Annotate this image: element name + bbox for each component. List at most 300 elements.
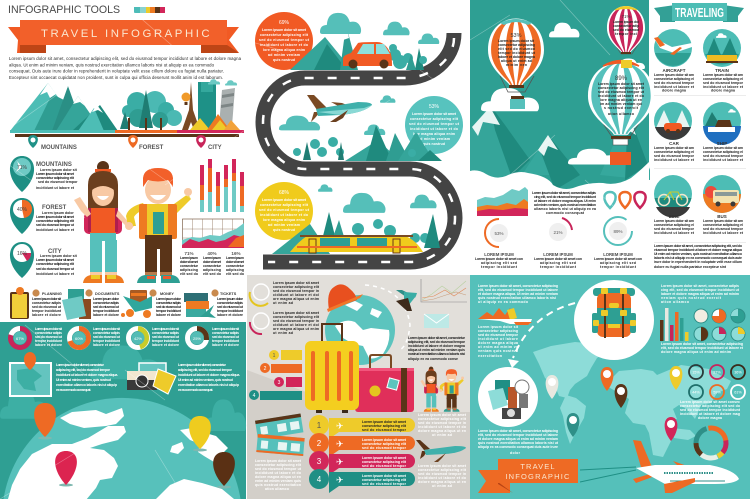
- numbered list step 2: 2: [317, 439, 322, 448]
- travel infographic banner: [478, 459, 578, 493]
- numbered list step 4: consectetur adipiscing elit: [362, 478, 407, 482]
- gauge: 21%: Lorem ipsum dolor sit amet con: [534, 257, 582, 261]
- numbered bars: 3: [278, 380, 281, 386]
- step: money: tempor incididunt: [156, 309, 182, 313]
- chart percentages with captions: Lorem ipsum: [180, 256, 198, 260]
- step: documents: DOCUMENTS: [95, 292, 120, 296]
- transport: car: Lorem ipsum dolor sit am: [654, 146, 694, 150]
- text block: top right: cing elit, sed do eiusmod tempor incididunt ut: [661, 288, 740, 292]
- text block: right: adipiscing elit, sed do eiusmod tempor: [408, 340, 466, 344]
- text block: top right: labore et dolore magna aliqua ut enim ad minim: [661, 292, 739, 296]
- location pin stat: mountains 71%: incididunt ut labore et: [36, 186, 75, 190]
- donut captions: labore et dolore: [35, 343, 62, 347]
- chart percentages with captions: consectetur: [203, 264, 222, 268]
- balloon: 53%: tempor incididunt ut: [498, 51, 536, 55]
- transport: train: Lorem ipsum dolor sit am: [703, 73, 743, 77]
- map pin: yellow: [189, 416, 211, 452]
- closing paragraph: Ut enim ad minim veniam, quis nostrud exercitation ullamco: [654, 252, 742, 256]
- gauge: 89%: tempor incididunt: [600, 265, 637, 269]
- small characters: [420, 367, 464, 412]
- text block: left: consectetur adipiscing: [478, 329, 518, 333]
- step: money: MONEY: [160, 292, 174, 296]
- text block: left: sed do eiusmod tempor: [478, 333, 519, 337]
- text block: characters: incididunt ut labore et do: [418, 425, 466, 429]
- panel: road poster top middle: [255, 12, 463, 262]
- text block: lower right: Lorem ipsum dolor sit amet consec: [680, 400, 740, 404]
- donut captions: sed do eiusmod ut: [93, 335, 121, 339]
- text block: lower right: sed do eiusmod tempor incididunt: [680, 408, 741, 412]
- ring stats: [689, 365, 745, 399]
- text block: map: [56, 363, 118, 392]
- text block: airplane: incididunt ut labore et do: [418, 476, 466, 480]
- timeline pin and label: city: CITY: [208, 145, 222, 151]
- text block: left: incididunt ut labore: [478, 337, 518, 341]
- step: documents: labore et dolore: [93, 313, 119, 317]
- shaded floor: [247, 370, 470, 499]
- text block: airplane: [418, 464, 467, 488]
- intro paragraph: consequat. Duis aute irure dolor in reprehenderit in voluptate velit esse cillum dolore eu fugiat nulla pariatur.: [9, 68, 224, 74]
- intro paragraph: Excepteur sint occaecat cupidatat non proident, sunt in culpa qui officia deserunt mollit anim id est laborum.: [9, 75, 223, 80]
- donut captions: consectetur adipis: [35, 331, 62, 335]
- text block: tickets: incididunt ut labore et do: [255, 471, 301, 475]
- stat circle: 68% yellow: sed do eiusmod tempor ut: [259, 208, 310, 212]
- text block: left: Lorem ipsum dolor sit: [478, 325, 519, 329]
- balloon: 89%: [588, 60, 654, 165]
- gauge: 89%: Lorem ipsum dolor sit amet con: [594, 257, 642, 261]
- numbered list step 1: Lorem ipsum dolor sit amet: [362, 420, 407, 424]
- donut captions: labore et dolore: [152, 343, 179, 347]
- numbered list step 1: sed do eiusmod tempor: [362, 428, 407, 432]
- clouds: [279, 13, 439, 213]
- text block: tickets: quis nostrud exercitation: [255, 483, 301, 487]
- chart percentages with captions: adipiscing: [226, 268, 244, 272]
- chart percentages with captions: 40%: [207, 251, 217, 256]
- transport: bus: incididunt ut labore et: [703, 231, 744, 235]
- text block: bottom left: elit, sed do eiusmod tempor incididunt ut labore: [478, 433, 558, 437]
- transport: car: sed do eiusmod tempor: [654, 154, 695, 158]
- stat circle: 53% teal: Lorem ipsum dolor sit amet: [412, 112, 457, 116]
- banner ropes: [580, 467, 636, 482]
- gauge with text 1: consectetur adipiscing elit: [273, 285, 320, 289]
- gauge with text 2: sed do eiusmod tempor in: [273, 319, 319, 323]
- colour swatches: [134, 7, 165, 13]
- text block: airplane: consectetur adipiscing elit: [418, 468, 467, 472]
- text block: bottom left: aliquip ex ea commodo consequat duis aute irure: [478, 445, 558, 449]
- panel: travel infographic poster top left: [8, 4, 245, 320]
- text block: lower right: dolore magna: [698, 416, 722, 420]
- donut stats with captions: [10, 327, 240, 348]
- gauge with text 2: ore magna aliqua ut enim: [273, 327, 319, 331]
- donut: 42%: 42%: [134, 336, 142, 341]
- location pin stat: city 16%: consectetur adipiscing elit: [36, 262, 75, 266]
- world map: [533, 342, 731, 457]
- text block: camera: [178, 363, 240, 392]
- balloon: 53%: labore et dolore magna: [498, 55, 535, 59]
- travel infographic banner: INFOGRAPHIC: [505, 472, 571, 481]
- gauge: 89%: 89%: [613, 229, 623, 234]
- numbered list step 4: 4: [317, 475, 322, 484]
- numbered list step 3: Lorem ipsum dolor sit amet: [362, 456, 407, 460]
- closing paragraph: eiusmod tempor incididunt ut labore et dolore magna aliqua: [654, 248, 742, 252]
- step: tickets: TICKETS: [220, 292, 237, 296]
- step: documents: Lorem ipsum dolor: [93, 297, 120, 301]
- stat circle: 68% yellow: [255, 182, 313, 240]
- timeline pin and label: mountains: MOUNTAINS: [41, 145, 77, 151]
- text block: top left: ut aliquip ex ea commodo: [478, 300, 528, 304]
- text block: tickets: ation ullamco: [265, 487, 289, 491]
- ring stats: 59%: [713, 390, 721, 394]
- location pin stat: forest 40%: Lorem ipsum dolor sit amet: [36, 215, 75, 219]
- balloon: 53%: minim ven: [506, 63, 527, 67]
- transport: ship: incididunt ut labore et: [703, 158, 744, 162]
- transport: aircraft: sed do eiusmod tempor: [654, 81, 695, 85]
- text block: lower right: [680, 400, 741, 420]
- closing paragraph: irure dolor in reprehenderit in voluptate velit esse cillum: [654, 260, 742, 264]
- step: tickets: [184, 289, 244, 318]
- step: planning: consectetur adipis: [32, 301, 61, 305]
- text block: left: veniam quis nostrud: [478, 349, 518, 353]
- stat circle: 53% teal: ad minim veniam: [418, 137, 450, 141]
- location pin stat: mountains 71%: Lorem ipsum dolor sit: [40, 168, 78, 172]
- stat circle: 69% orange: 69%: [279, 20, 290, 26]
- text block: top left: quis nostrud exercitation ullamco laboris nisi: [478, 296, 556, 300]
- transport: bike: BIKE: [669, 214, 679, 219]
- transport: ship: consectetur adipiscing el: [703, 150, 743, 154]
- gauge: 21%: [534, 218, 582, 269]
- travel items in circle: [478, 367, 538, 427]
- step: money: sed do eiusmod ut: [156, 305, 182, 309]
- step: tickets: consectetur adipis: [217, 301, 243, 305]
- text block: right: Lorem ipsum dolor sit amet, consectetur: [408, 336, 466, 340]
- balloon: 71%: consectetur adip: [613, 24, 639, 28]
- numbered list step 2: Lorem ipsum dolor sit amet: [362, 438, 407, 442]
- numbered list step 4: ✈: [336, 475, 344, 485]
- dashed route arc: [513, 303, 575, 358]
- dashed flight arc: [365, 285, 410, 350]
- text block: centre: ullamco laboris nisi ut aliquip ex ea: [534, 207, 596, 211]
- numbered list step 1: 1: [317, 421, 322, 430]
- illustration: city landmarks: [182, 79, 240, 130]
- text block: top left: et dolore magna aliqua. Ut enim ad minim veniam: [478, 292, 558, 296]
- car: [343, 42, 392, 68]
- stat circle: 53% teal: quis nostrud: [423, 142, 445, 146]
- chart percentages with captions: elit sed do: [226, 272, 244, 276]
- ring stats: 44%: [692, 390, 700, 394]
- text block: airplane: sed do eiusmod tempor in: [418, 472, 466, 476]
- numbered list step 4: Lorem ipsum dolor sit amet: [362, 474, 407, 478]
- step: money: labore et dolore: [156, 313, 181, 317]
- numbered bars: 1: [273, 353, 276, 359]
- title ribbon: [8, 20, 239, 53]
- text block: centre: [532, 191, 597, 215]
- balloon: 53%: elit sed do eiusmod: [498, 47, 535, 51]
- illustration: forest: [120, 90, 182, 130]
- yellow suitcase: [305, 324, 359, 413]
- text block: top left: [478, 284, 558, 304]
- text block: lower right: incididunt ut labore et dolore mag: [680, 412, 740, 416]
- intro paragraph: aliqua. Ut enim ad minim veniam, quis nostrud exercitation ullamco laboris nisi ut aliquip ex ea commodo: [9, 62, 215, 68]
- timeline pin and label: forest: FOREST: [139, 145, 164, 151]
- transport: car: CAR: [669, 141, 680, 146]
- text block: left: exercitation: [478, 354, 502, 358]
- stat circle: 68% yellow: 68%: [279, 190, 290, 196]
- text block: right: aliqua ut enim ad minim veniam quis: [408, 348, 465, 352]
- pink suitcase: [355, 355, 414, 412]
- numbered list step 3: [309, 451, 415, 475]
- numbered list step 4: sed do eiusmod tempor: [362, 482, 407, 486]
- gauge: 53%: LOREM IPSUM: [484, 252, 514, 257]
- chart percentages with captions: elit sed do: [203, 272, 221, 276]
- snowy mountains: [470, 105, 650, 190]
- transport: car: consectetur adipiscing el: [654, 150, 694, 154]
- stat circle: 53% teal: sed do eiusmod tempor ut: [409, 122, 460, 126]
- timeline pin and label: city: [196, 135, 222, 151]
- balloon: 53%: aliqua ut enim ad: [501, 59, 532, 63]
- transport: train: TRAIN: [715, 68, 729, 73]
- intro paragraph: [9, 56, 242, 80]
- gauge with text 1: Lorem ipsum dolor sit amet: [273, 281, 320, 285]
- gauge with text 1: ut enim ad: [273, 301, 293, 305]
- three pins: [604, 192, 646, 208]
- chart percentages with captions: 16%: [231, 251, 241, 256]
- stat circle: 68% yellow: consectetur adipiscing elit: [260, 203, 309, 207]
- transport: aircraft: Lorem ipsum dolor sit am: [654, 73, 694, 77]
- balloon: 89%: Lorem ipsum dolor sit amet: [598, 82, 645, 86]
- step: money: Lorem ipsum dolor: [156, 297, 182, 301]
- transport: ship: SHIP: [717, 141, 727, 146]
- donut captions: tempor incididunt: [152, 339, 180, 343]
- location pin stat: mountains 71%: Lorem ipsum dolor sit amet: [36, 172, 75, 176]
- donut: 60%: [70, 328, 89, 348]
- location pin stat: city 16%: sed do eiusmod tempor ut: [36, 267, 75, 271]
- intro paragraph: Lorem ipsum dolor sit amet, consectetur adipiscing elit, sed do eiusmod tempor incididunt ut labore et dolore magna: [9, 56, 242, 61]
- donut captions: sed do eiusmod ut: [212, 335, 240, 339]
- road: [263, 33, 455, 262]
- location pin stat: mountains 71%: [9, 156, 78, 192]
- balloon: 71%: [607, 6, 645, 68]
- stat circle: 69% orange: sed do eiusmod tempor ut: [259, 38, 310, 42]
- transport: ship: sed do eiusmod tempor: [703, 154, 744, 158]
- transport: bus: consectetur adipiscing el: [703, 223, 743, 227]
- location pin stat: city 16%: incididunt ut labore et: [36, 272, 75, 276]
- text block: bottom left: Lorem ipsum dolor sit amet, consectetur adipiscing: [478, 429, 558, 433]
- map pin: orange: [34, 403, 56, 440]
- text block: centre: Lorem ipsum dolor sit amet, consectetur adipis: [532, 191, 596, 195]
- numbered list step 1: [309, 415, 415, 439]
- text block: mid right: dolore magna aliqua ut enim ad minim: [661, 350, 731, 354]
- donut captions: tempor incididunt: [93, 339, 121, 343]
- numbered list step 3: 3: [317, 457, 322, 466]
- stat circle: 53% teal: 53%: [429, 104, 440, 110]
- gauge: 21%: tempor incididunt: [540, 265, 577, 269]
- background clouds: [0, 345, 246, 431]
- bar chart: [660, 308, 688, 341]
- text block: right: incididunt ut labore et dolore magna: [408, 344, 465, 348]
- panel: luggage poster bottom middle: [247, 275, 470, 499]
- boy: [125, 168, 192, 283]
- text block: tickets: [255, 459, 302, 491]
- location pin stat: mountains 71%: 71%: [17, 165, 28, 171]
- text block: airplane: ut enim ad: [432, 484, 452, 488]
- transport: ship: [703, 102, 744, 162]
- location pin stat: city 16%: CITY: [48, 249, 62, 255]
- text block: bottom left: [478, 429, 559, 455]
- balloon: 89%: consectetur adipiscing elit: [598, 86, 645, 90]
- text block: right: nostrud exercitation ullamco laboris nisi: [408, 352, 465, 356]
- text block: left: [478, 325, 519, 358]
- numbered list step 1: ✈: [336, 421, 344, 431]
- donut: 60%: 60%: [75, 336, 83, 341]
- white cloud band: [470, 162, 649, 280]
- text block: centre: ad minim veniam, quis nostrud exercitation: [534, 203, 596, 207]
- numbered bars: 4: [253, 393, 256, 399]
- text block: bottom left: et dolore magna aliqua ut enim ad minim veniam: [478, 437, 558, 441]
- donut: 67%: [10, 328, 30, 348]
- camera and photos: [127, 363, 176, 394]
- text block: tickets: dolore magna aliqua ut en: [255, 475, 301, 479]
- hat: [327, 284, 363, 312]
- text block: characters: ut enim ad: [432, 433, 452, 437]
- transport: ship: Lorem ipsum dolor sit am: [703, 146, 743, 150]
- stat circle: 53% teal: [405, 96, 463, 154]
- step: documents: [62, 289, 120, 320]
- donut captions: labore et dolore: [93, 343, 120, 347]
- mini landscape chart: [478, 308, 532, 325]
- numbered list step 2: [309, 433, 415, 457]
- panel background: [0, 322, 246, 499]
- transport: aircraft: incididunt ut labore et: [654, 85, 695, 89]
- panel: traveling column: [654, 3, 746, 269]
- panel: globe poster bottom left: [0, 322, 246, 499]
- balloon: 71%: 71%: [621, 14, 631, 19]
- teal sky: [470, 0, 649, 195]
- donut captions: sed do eiusmod ut: [152, 335, 180, 339]
- line chart: [421, 279, 467, 302]
- step: tickets: labore et dolore: [217, 313, 243, 317]
- location pin stat: forest 40%: 40%: [17, 207, 28, 213]
- step: money: [121, 289, 182, 318]
- text block: camera: adipiscing elit, sed do eiusmod tempor: [178, 368, 233, 372]
- text block: top left: Lorem ipsum dolor sit amet, consectetur adipiscing: [478, 284, 558, 288]
- balloon: 89%: s nostrud exercit: [604, 106, 639, 110]
- balloon: 71%: sed do eiusmod: [613, 28, 639, 32]
- balloon: 71%: Lorem ipsum dol: [613, 20, 639, 24]
- step: documents: sed do eiusmod ut: [93, 305, 120, 309]
- gauge with text 1: ore magna aliqua ut enim: [273, 297, 319, 301]
- gauge with text 1: [250, 281, 320, 306]
- stat circle: 68% yellow: incididunt ut labore et do: [260, 213, 308, 217]
- gauge with text 1: sed do eiusmod tempor in: [273, 289, 319, 293]
- donut captions: consectetur adipis: [152, 331, 179, 335]
- ring stats: 27%: [713, 370, 721, 374]
- location pin stat: city 16%: [10, 242, 78, 278]
- gauge: 89%: adipiscing elit sed: [600, 261, 636, 265]
- balloon: 53%: consectetur adipiscing: [498, 43, 535, 47]
- numbered list step 2: consectetur adipiscing elit: [362, 442, 407, 446]
- gauge: 53%: 53%: [494, 231, 504, 236]
- text block: left: dolore magna aliqua: [478, 341, 518, 345]
- ring stats: 36%: [734, 370, 742, 374]
- chart percentages with captions: dolor sit amet: [203, 260, 222, 264]
- timeline bar: [10, 130, 244, 137]
- stat circle: 53% teal: consectetur adipiscing elit: [410, 117, 459, 121]
- transport: bike: incididunt ut labore et: [654, 231, 695, 235]
- closing paragraph: [654, 244, 742, 269]
- numbered list step 1: consectetur adipiscing elit: [362, 424, 407, 428]
- text block: centre: commodo consequat: [546, 211, 585, 215]
- text block: camera: Lorem ipsum dolor sit amet, consectetur: [178, 363, 227, 367]
- girl: [74, 161, 134, 283]
- envelope: [424, 314, 449, 328]
- text block: map: adipiscing elit, sed do eiusmod tempor: [56, 368, 111, 372]
- train: [290, 235, 423, 253]
- donut captions: [35, 327, 240, 347]
- transport: bus: [703, 175, 744, 235]
- gauge: 21%: adipiscing elit sed: [540, 261, 576, 265]
- donut captions: sed do eiusmod ut: [35, 335, 63, 339]
- donut captions: Lorem ipsum dolor sit: [35, 327, 63, 331]
- text block: characters: dolore magna aliqua ut en: [418, 429, 466, 433]
- text block: camera: exercitation ullamco laboris nisi ut aliquip: [178, 383, 239, 387]
- stat circle: 68% yellow: ad minim veniam: [268, 223, 300, 227]
- area chart: [182, 219, 244, 248]
- transport: car: [654, 102, 695, 162]
- stat circle: 53% teal: lore magna aliqua enim: [413, 132, 455, 136]
- balloon: 53%: Lorem ipsum dolor sit: [498, 39, 535, 43]
- step: planning: PLANNING: [42, 292, 62, 296]
- location pin stat: forest 40%: incididunt ut labore et: [36, 228, 75, 232]
- text block: centre: ut labore et dolore magna aliqua. Ut enim: [534, 199, 596, 203]
- text block: bottom left: dolor: [510, 451, 521, 455]
- transport: aircraft: [654, 29, 695, 92]
- location pin stat: forest 40%: Lorem ipsum dolor: [42, 211, 74, 215]
- balloon: 53%: 53%: [510, 33, 522, 39]
- stacked bar chart: [200, 159, 244, 212]
- balloon: 89%: 89%: [615, 76, 628, 82]
- location pin stat: forest 40%: sed do eiusmod tempor ut: [36, 223, 75, 227]
- gauge with text 2: consectetur adipiscing elit: [273, 315, 320, 319]
- stat circle: 69% orange: lore magna aliqua enim: [263, 48, 305, 52]
- balloon: 89%: ation ullamco: [608, 112, 634, 116]
- balloon: 89%: im ad minim veniam qui: [600, 102, 642, 106]
- location pin stat: mountains 71%: consectetur adipiscing elit: [36, 176, 75, 180]
- area chart: [477, 187, 528, 216]
- donut: 42%: [128, 328, 148, 348]
- donut: 67%: 67%: [16, 336, 24, 341]
- step: tickets: tempor incididunt: [217, 309, 244, 313]
- globe with continents: [4, 398, 240, 499]
- transport: train: sed do eiusmod tempor: [703, 81, 744, 85]
- small plane: [396, 290, 417, 311]
- step: planning: sed do eiusmod ut: [32, 305, 62, 309]
- text block: airplane: Lorem ipsum dolor sit amet: [418, 464, 467, 468]
- location pin stat: forest 40%: FOREST: [42, 205, 67, 211]
- stat circle: 68% yellow: lore magna aliqua enim: [263, 218, 305, 222]
- text block: map: Lorem ipsum dolor sit amet, consectetur: [56, 363, 105, 367]
- text block: mid right: elit, sed do eiusmod tempor incididunt ut labore et: [661, 346, 744, 350]
- ring stats: 61%: [734, 390, 742, 394]
- map pin: crimson: [55, 451, 77, 486]
- airplane: [307, 95, 372, 122]
- transport: bus: Lorem ipsum dolor sit am: [703, 219, 743, 223]
- step: documents: consectetur adipis: [93, 301, 119, 305]
- text block: top left: elit, sed do eiusmod tempor incididunt ut labore: [478, 288, 558, 292]
- balloon: 89%: incididunt ut labore et do: [598, 94, 644, 98]
- location pin stat: city 16%: 16%: [17, 251, 28, 257]
- donut captions: tempor incididunt: [35, 339, 63, 343]
- text block: characters: [418, 413, 467, 437]
- numbered list step 3: consectetur adipiscing elit: [362, 460, 407, 464]
